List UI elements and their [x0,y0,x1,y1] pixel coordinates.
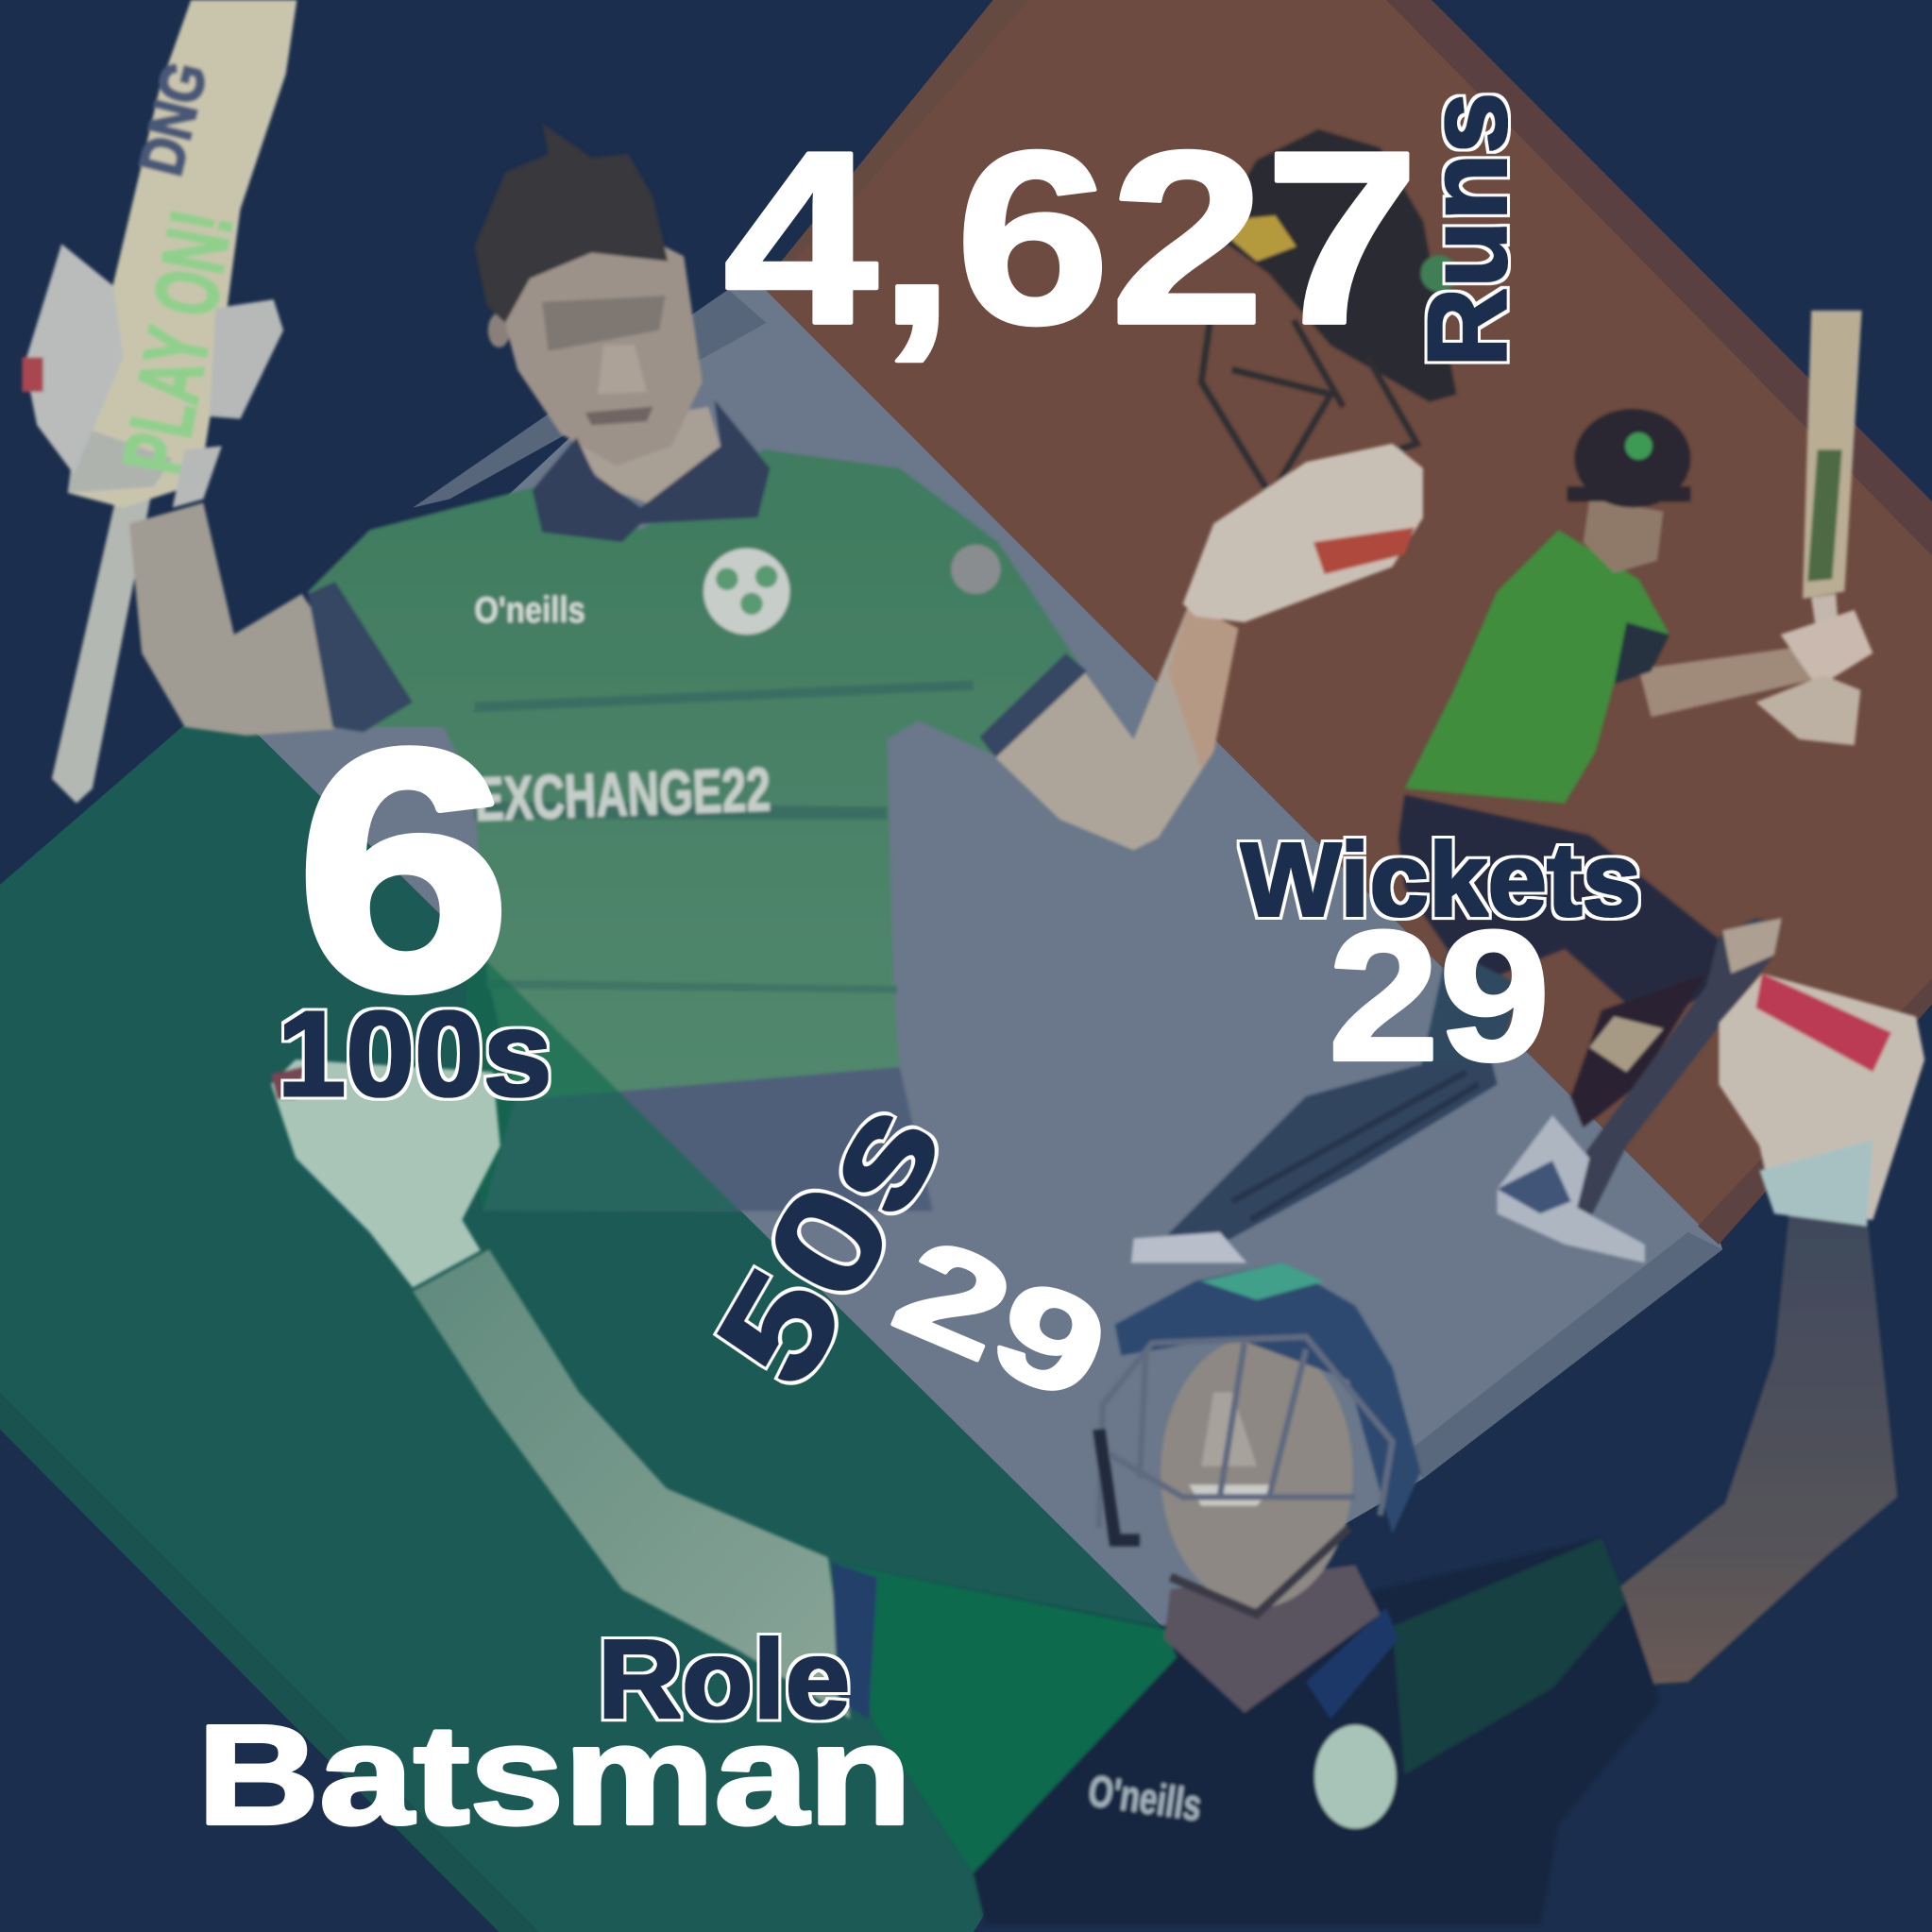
left arm [129,502,367,736]
stat: wickets label: Wickets [1241,822,1641,939]
shirt [308,449,1084,1103]
bat blade [68,0,297,508]
sponsor text: EXCHANGE22 [474,754,771,834]
left glove [271,1059,500,1288]
stat: hundreds value: 6 [296,678,512,1060]
bat text PLAY ON: PLAY ON! [104,203,251,482]
band: grey [255,271,1722,1629]
sponsor logo: O'neills [474,590,585,631]
player: celebrating with raised arms [271,974,1924,1924]
face [502,222,703,466]
hair [474,123,668,323]
stat: wickets value: 29 [1329,893,1550,1099]
back leg pad [1589,1016,1664,1072]
player: batting stance [1131,311,1873,1263]
player: batsman raising bat and helmet [22,0,1458,1212]
stat: fifties label: 50s [685,1073,974,1411]
sleeve crest [951,545,1001,594]
bat handle [52,493,150,804]
bat handle [1811,594,1839,631]
band: brown [761,0,1932,1245]
shirt [1405,530,1669,804]
stat: runs label: Runs [1406,93,1530,367]
stat: hundreds label: 100s [278,987,552,1122]
gloves on bat [25,244,123,474]
ear [488,313,510,347]
badge [1314,1725,1396,1828]
helmet held [1201,129,1458,499]
role value: Batsman [197,1695,912,1854]
raised glove [1183,444,1423,622]
stat: fifties value: 29 [875,1208,1128,1431]
back shoe [1497,1115,1645,1263]
lower back leg [1571,974,1706,1127]
shirt [832,1537,1660,1924]
green tint on shirt [462,942,739,1212]
collar [1306,1608,1398,1719]
sponsor logo: O'neills [1085,1765,1205,1830]
role label: Role [598,1618,850,1741]
collar [533,400,771,542]
trousers [1398,795,1737,1025]
helmet [1099,1263,1420,1614]
right arm [1617,1213,1897,1686]
stat: runs value: 4,627 [723,101,1419,376]
sleeve cuff right [979,653,1087,757]
right glove [1719,974,1924,1220]
front shoe [1131,1232,1247,1263]
helmet [1568,409,1690,508]
neck [567,407,727,505]
face [1584,499,1664,573]
arms [1638,647,1811,717]
gloves [1781,610,1873,687]
bat [1803,311,1862,599]
left arm [413,1249,850,1719]
leg pad front [1164,1059,1497,1245]
shirt stripes [474,680,974,712]
shirt green portion [832,1563,1177,1873]
bat text DNG: DNG [126,55,220,182]
badge [703,549,789,635]
sleeve cuff left [308,582,413,732]
neck [1164,1565,1380,1713]
band: green [0,724,1164,1932]
face [1161,1337,1353,1608]
right arm [991,603,1238,850]
trousers [483,1067,933,1212]
